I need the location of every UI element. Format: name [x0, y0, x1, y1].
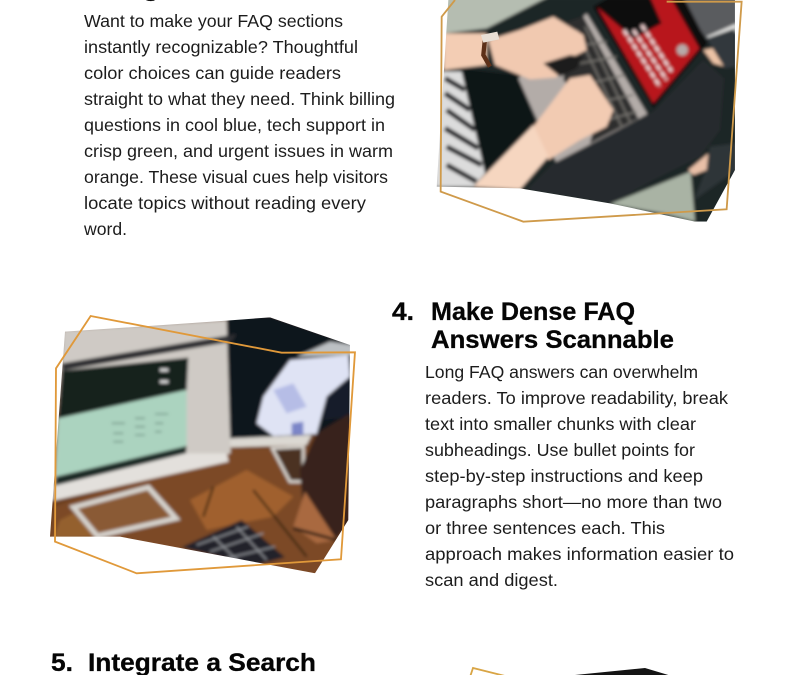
section 4 body text: readers. To improve readability, break: [425, 388, 728, 408]
section 4 body text: subheadings. Use bullet points for: [425, 440, 695, 460]
section 3 body text: Want to make your FAQ sections: [84, 11, 343, 31]
photo frame outline: [441, 0, 742, 222]
section 3 body text: questions in cool blue, tech support in: [84, 115, 385, 135]
section 3 body text: orange. These visual cues help visitors: [84, 167, 388, 187]
section 3 body text: [83, 11, 395, 239]
section 4 body text: scan and digest.: [425, 570, 558, 590]
photo: section 5 top edge with frame: [470, 668, 675, 675]
section 3 body text: crisp green, and urgent issues in warm: [84, 141, 393, 161]
wristwatch: [481, 32, 499, 67]
section 4 body text: approach makes information easier to: [425, 544, 734, 564]
section 4 body text: paragraphs short—no more than two: [425, 492, 722, 512]
section 3 body text: instantly recognizable? Thoughtful: [84, 37, 358, 57]
section 4 heading: Make Dense FAQ: [431, 298, 635, 326]
section 3 body text: locate topics without reading every: [84, 193, 366, 213]
photo frame outline: [55, 316, 355, 573]
section 4 body text: step-by-step instructions and keep: [425, 466, 703, 486]
section 4 heading: [392, 298, 674, 354]
section 4 body text: text into smaller chunks with clear: [425, 414, 696, 434]
section 4 body text: Long FAQ answers can overwhelm: [425, 362, 698, 382]
section 3 body text: color choices can guide readers: [84, 63, 341, 83]
section 3 body text: straight to what they need. Think billing: [84, 89, 395, 109]
section 4 body text: or three sentences each. This: [425, 518, 665, 538]
section 3 body text: word.: [83, 219, 127, 239]
section 4 heading: 4.: [392, 298, 414, 326]
section 4 heading: Answers Scannable: [431, 326, 674, 354]
photo: hands typing on a laptop with frame: [433, 0, 742, 230]
photo: desktop monitors on wooden desk with frame: [47, 313, 357, 580]
section 4 body text: [425, 362, 734, 590]
